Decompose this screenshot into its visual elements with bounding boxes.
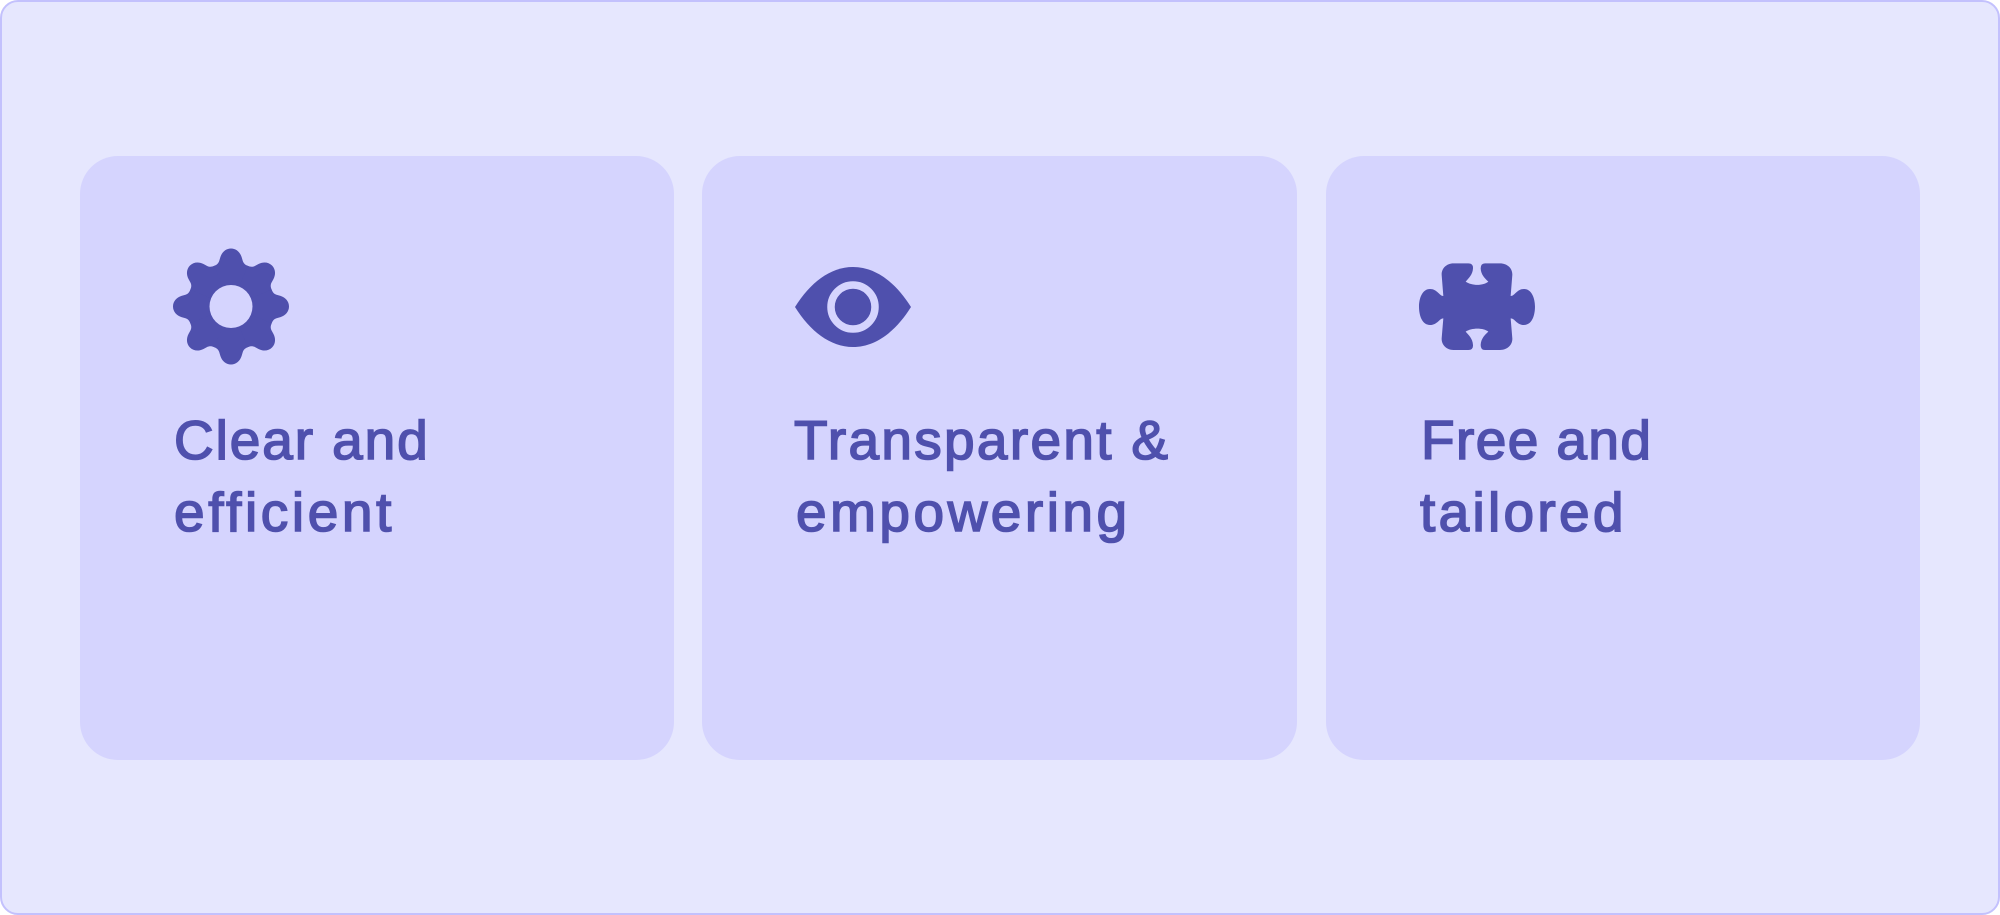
panel: clear and efficient [80, 156, 674, 760]
heading: free and tailored: tailored [1420, 481, 1627, 543]
heading: transparent and empowering: Transparent & [794, 409, 1170, 471]
heading: free and tailored: Free and [1421, 409, 1652, 471]
heading: free and tailored [1420, 409, 1652, 543]
icon: puzzle piece [1419, 263, 1535, 350]
panel: transparent and empowering [702, 156, 1297, 760]
heading: clear and efficient: Clear and [174, 409, 430, 471]
heading: transparent and empowering: empowering [796, 481, 1131, 543]
heading: clear and efficient: efficient [174, 481, 395, 543]
icon: eye [795, 267, 911, 347]
heading: transparent and empowering [794, 409, 1170, 544]
heading: clear and efficient [174, 409, 430, 543]
panel: free and tailored [1326, 156, 1920, 760]
icon: gear [173, 248, 289, 364]
